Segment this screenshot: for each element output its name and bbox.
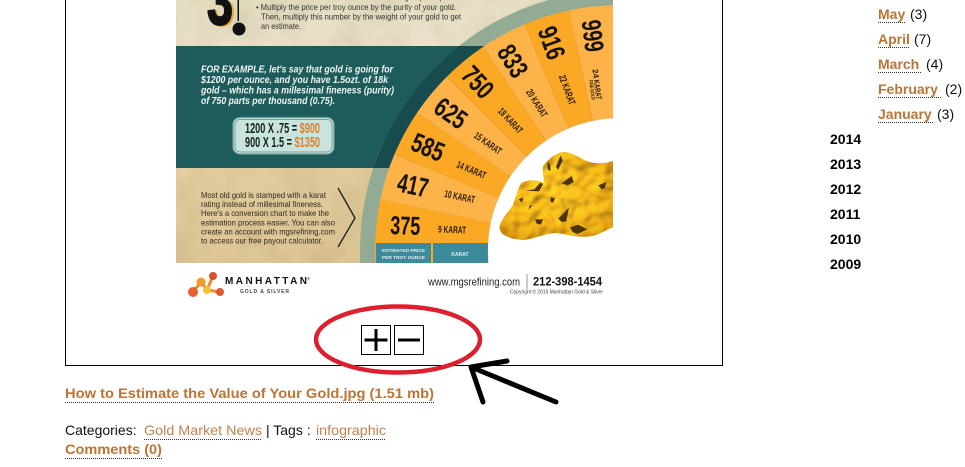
archive months: March xyxy=(878,56,919,72)
segment: 417 xyxy=(380,154,498,223)
text block: example: gold – which has a millesimal fineness (purity) xyxy=(200,86,395,96)
archive years: 2009 xyxy=(830,256,861,272)
segment: 625: 625 xyxy=(429,92,473,135)
segment: 625 xyxy=(417,77,527,176)
text block: karat note: Most old gold is stamped with a karat xyxy=(201,191,327,200)
text block: instructions: Then, multiply this number by the weight of your gold to get xyxy=(261,12,462,22)
text block: karat note: create an account with mgsrefining.com xyxy=(201,228,335,236)
archive years: 2013 xyxy=(830,156,861,172)
segment: 833 xyxy=(483,24,568,141)
file link: How to Estimate the Value of Your Gold.jpg (1.51 mb) xyxy=(65,385,434,401)
archive years: 2014 xyxy=(830,131,861,147)
logo: Manhattan Gold & Silver: MANHATTAN xyxy=(225,276,307,287)
segment: 999 xyxy=(569,5,613,121)
text block: karat note: rating instead of millesimal fineness. xyxy=(201,200,323,209)
text block: instructions: an estimate. xyxy=(261,21,301,31)
segment: 750: 18 KARAT xyxy=(495,106,524,136)
text block: instructions xyxy=(256,0,462,31)
segment: 999: 999 xyxy=(576,18,609,54)
contact details: Copyright © 2015 Manhattan Gold & Silver xyxy=(510,288,603,296)
archive months: May xyxy=(878,6,905,22)
archive months: April xyxy=(878,31,910,47)
archive years: 2010 xyxy=(830,231,861,247)
categories and tags: Categories: xyxy=(65,422,137,438)
archive months: (3) xyxy=(910,6,927,22)
segment: 916: 916 xyxy=(532,22,571,64)
table header: karat xyxy=(433,243,488,263)
archive months: February xyxy=(878,81,938,97)
table header: estimated price: PER TROY OUNCE xyxy=(382,255,426,261)
text block: example: FOR EXAMPLE, let's say that gold is going for xyxy=(201,64,394,76)
table header: estimated price xyxy=(376,243,431,263)
categories and tags: infographic xyxy=(316,422,386,438)
annotation: black arrow xyxy=(471,361,556,402)
segment: 375: 9 KARAT xyxy=(438,225,466,236)
text block: example: $1200 per ounce, and you have 1.5ozt. of 18k xyxy=(200,75,389,86)
segment: 375: 375 xyxy=(390,210,421,241)
segment: 417: 10 KARAT xyxy=(443,189,476,206)
segment: 585 xyxy=(394,113,511,198)
archive months: (3) xyxy=(937,106,954,122)
panel: karat note background xyxy=(176,168,374,263)
contact details: www.mgsrefining.com xyxy=(427,276,520,288)
archive years: 2012 xyxy=(830,181,861,197)
text block: karat note xyxy=(201,191,335,246)
logo: Manhattan Gold & Silver: GOLD & SILVER xyxy=(240,289,289,295)
callout: calculation: 1200 X .75 = $900 xyxy=(245,120,320,137)
outer ring xyxy=(360,0,613,263)
segment: 999: FINE GOLD xyxy=(587,80,596,100)
segment: 833: 20 KARAT xyxy=(523,88,549,120)
callout: calculation xyxy=(233,118,334,154)
image frame xyxy=(66,0,722,366)
categories and tags xyxy=(65,422,386,440)
contact details xyxy=(427,274,603,296)
segment: 585: 14 KARAT xyxy=(455,160,487,182)
archive months: (7) xyxy=(914,31,931,47)
segment: 750: 750 xyxy=(455,60,500,105)
table header: estimated price: ESTIMATED PRICE xyxy=(382,248,426,254)
zoom in button xyxy=(362,326,390,354)
text block: karat note: Here's a conversion chart to make the xyxy=(201,209,329,218)
infographic artwork xyxy=(176,0,629,263)
archive months xyxy=(878,6,962,122)
table header: karat: KARAT xyxy=(451,252,469,258)
icon: gold nugget xyxy=(499,152,613,240)
segment: 916 xyxy=(524,10,593,128)
logo: Manhattan Gold & Silver xyxy=(188,272,310,297)
archive years xyxy=(830,131,861,272)
archive months: (2) xyxy=(945,81,962,97)
segment: 417: 417 xyxy=(395,168,431,203)
archive years: 2011 xyxy=(830,206,861,222)
icon: chevron xyxy=(338,188,355,247)
text block: instructions: • Multiply the price per troy ounce by the purity of your gold. xyxy=(256,2,456,12)
text block: karat note: estimation process easier. You can also xyxy=(201,218,335,228)
contact details: 212-398-1454 xyxy=(533,276,603,288)
zoom out button xyxy=(394,326,424,354)
segment: 999: 24 xyxy=(590,69,601,79)
archive months: (4) xyxy=(926,56,943,72)
panel: instructions background xyxy=(176,0,548,46)
segment: 916: 22 KARAT xyxy=(556,74,577,107)
segment: 999: KARAT xyxy=(592,79,603,100)
logo: Manhattan Gold & Silver: ® xyxy=(307,276,310,281)
categories and tags: | Tags : xyxy=(266,422,311,438)
text block: example: of 750 parts per thousand (0.75). xyxy=(201,96,335,107)
panel: example background xyxy=(176,46,458,168)
annotation: red ellipse xyxy=(316,306,480,372)
outer ring in teal band xyxy=(373,46,613,168)
segment: 625: 15 KARAT xyxy=(472,131,503,157)
text block: example xyxy=(200,64,395,107)
segment: 585: 585 xyxy=(407,127,449,168)
text block: karat note: to access our free payout calculator. xyxy=(201,236,323,246)
categories and tags: Gold Market News xyxy=(144,422,262,438)
inner white circle xyxy=(488,118,613,263)
segment: 750 xyxy=(447,47,546,157)
callout: calculation: 900 X 1.5 = $1350 xyxy=(245,134,320,151)
segment: 375 xyxy=(375,199,491,263)
archive months: January xyxy=(878,106,932,122)
comments link: Comments (0) xyxy=(65,441,162,457)
segment: 833: 833 xyxy=(491,39,534,83)
